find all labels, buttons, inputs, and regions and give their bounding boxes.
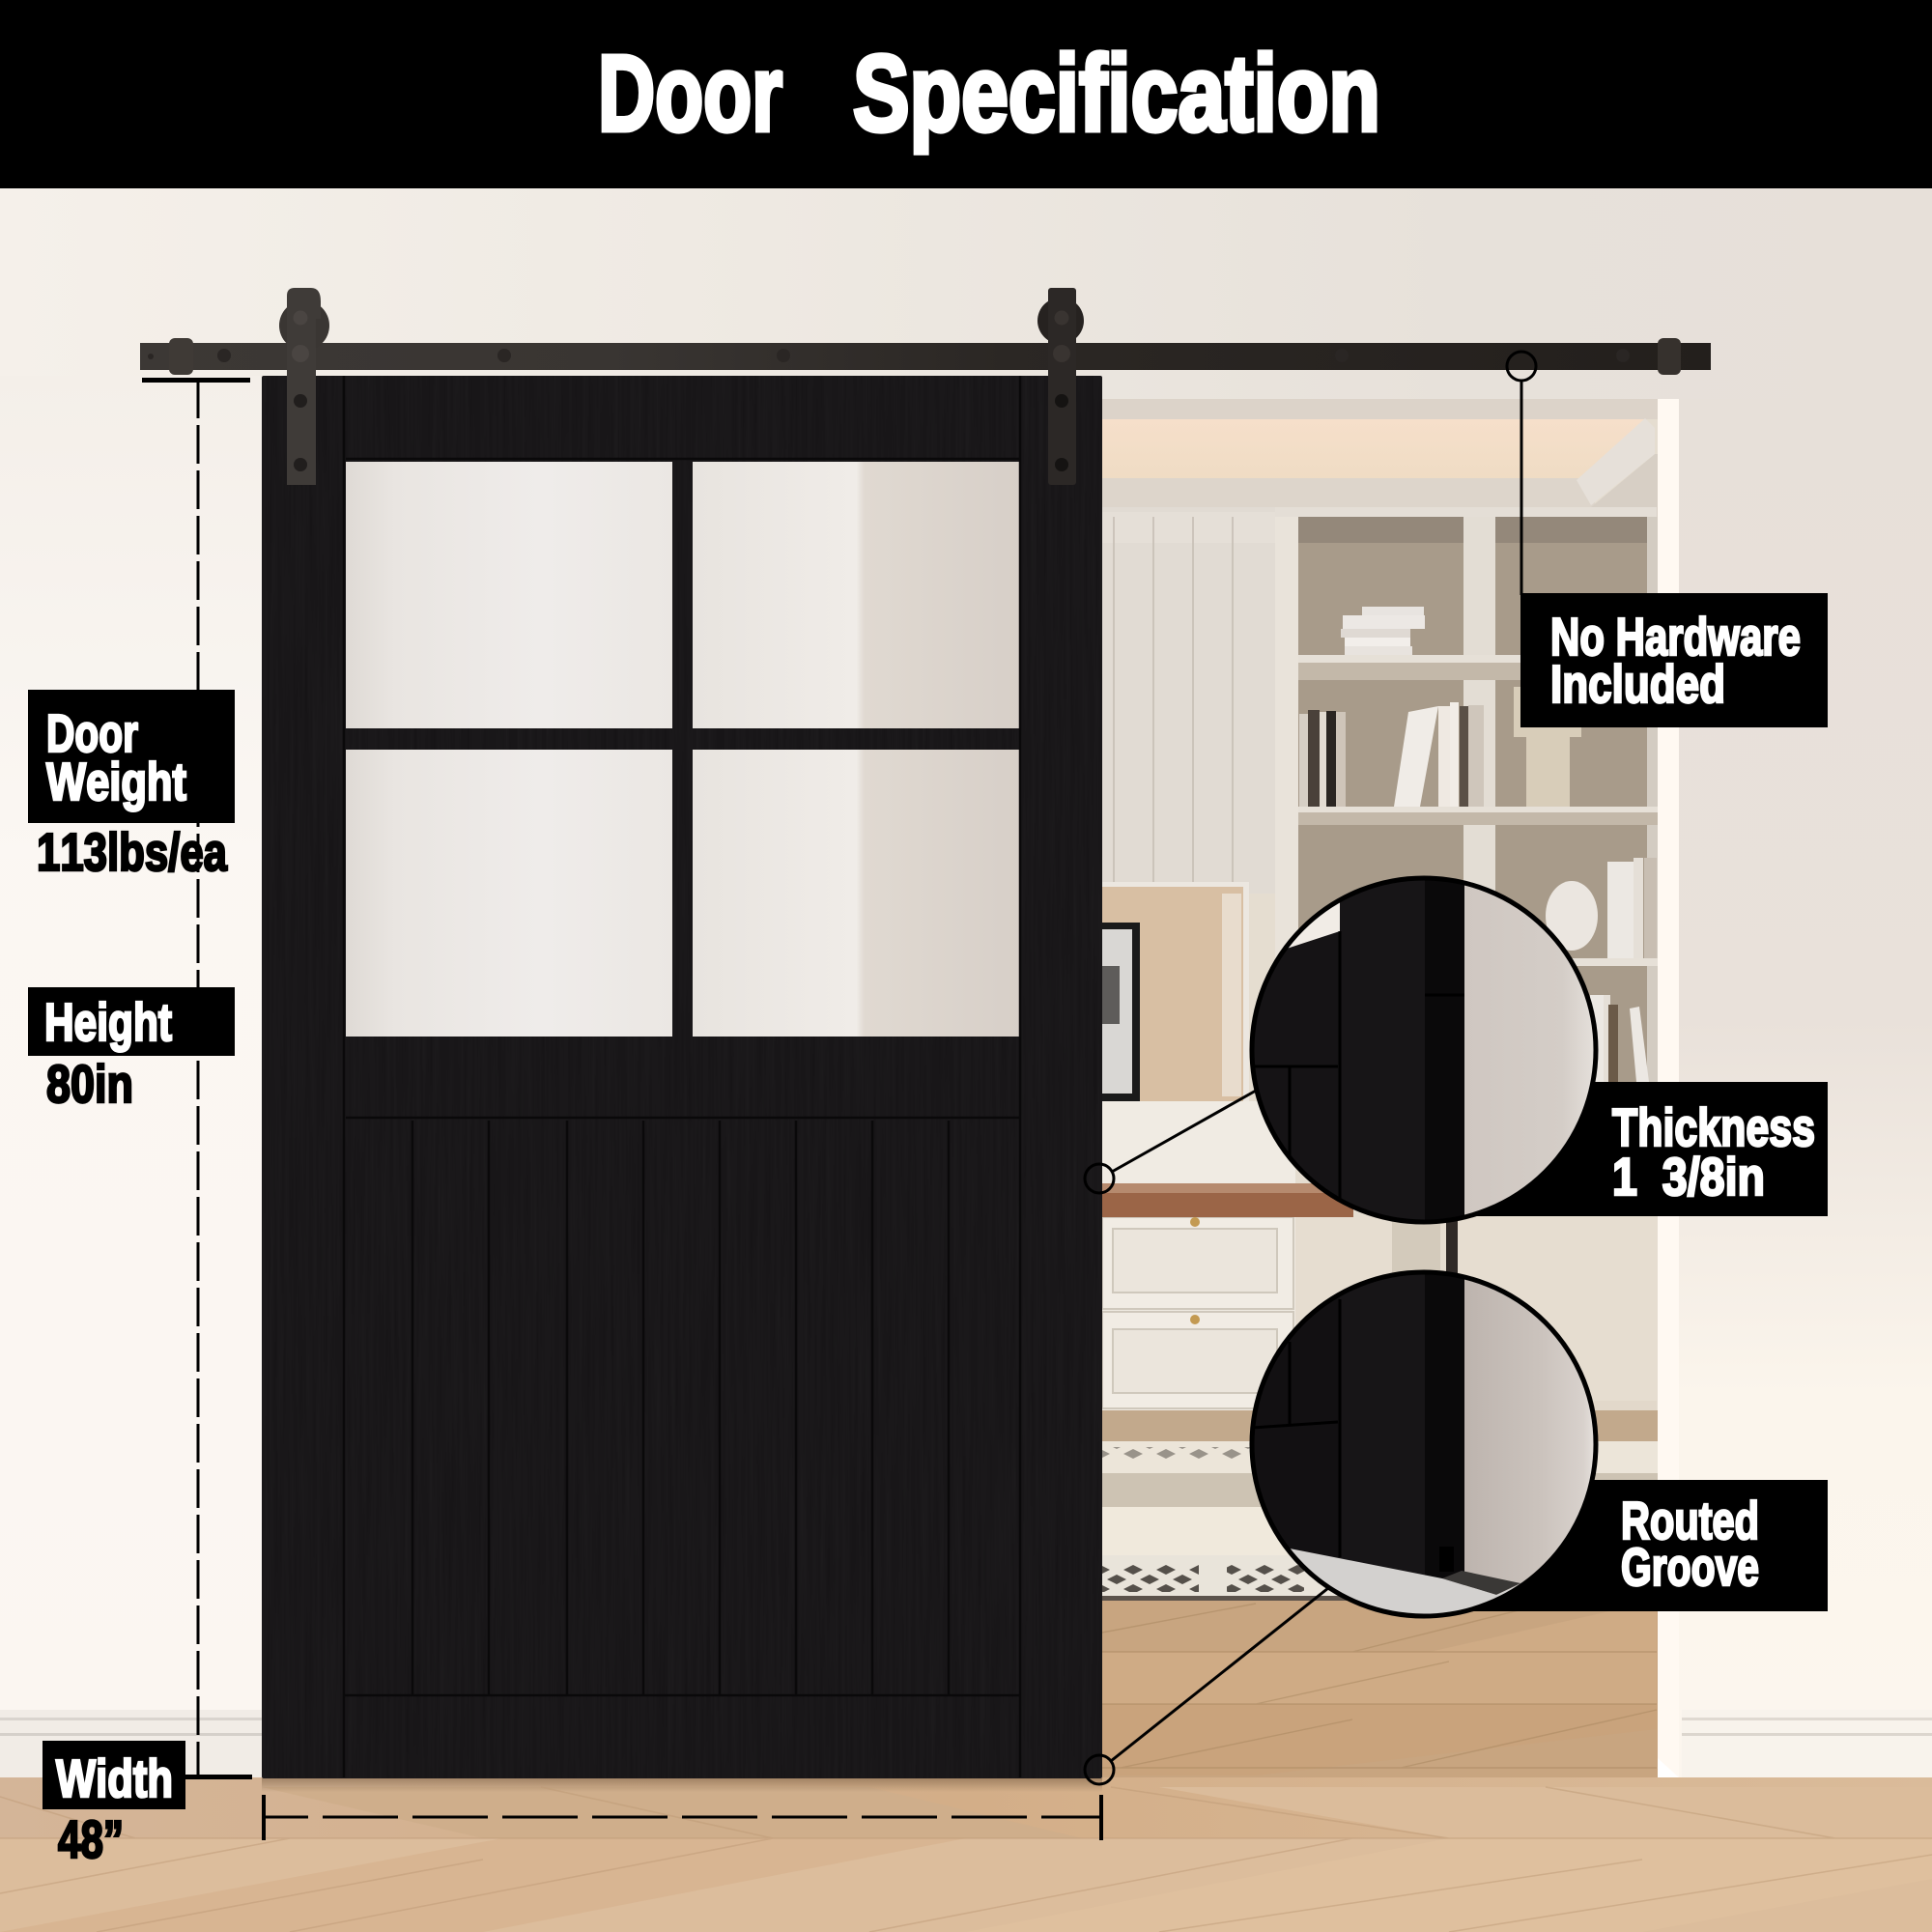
callout: no hardware included [1520,593,1828,727]
callout: door weight: Door [46,703,138,763]
sliding barn door [262,376,1102,1778]
callout: width: Width [56,1748,173,1808]
callout: thickness [1449,1082,1828,1216]
framed art [1102,882,1249,1104]
callout: height: Height [44,992,172,1052]
callout: width: 48” [58,1809,124,1869]
glass panes [346,462,1020,1037]
title [598,33,1380,154]
rail clips [169,338,193,375]
callout: routed groove: Routed [1621,1491,1759,1550]
door jamb [1658,399,1679,1777]
title: Door [598,33,782,154]
leader: routed groove marker [1085,1588,1328,1784]
callout: thickness: 1 3/8in [1612,1147,1765,1207]
books second shelf [1299,702,1484,807]
bookcase [1275,507,1658,1116]
callout: routed groove: Groove [1621,1537,1759,1597]
width dimension line [262,1795,1103,1840]
side crown moulding [1577,418,1655,505]
panelled wall [1102,507,1276,894]
ceiling glow [1102,419,1645,480]
ceiling soffit [1102,399,1658,419]
detail circle: door thickness [1246,874,1605,1227]
header band [0,0,1932,188]
books fourth shelf [1590,995,1649,1082]
crown moulding [1102,478,1595,507]
door frame [262,376,1102,1778]
callout: door weight: Weight [46,752,186,811]
callout: height [28,987,235,1114]
callout: no hardware included: Included [1550,654,1725,714]
height dimension line [142,378,252,1779]
callout: no hardware included: No Hardware [1550,607,1801,667]
back wall and floor of the room [1102,399,1658,1777]
books third shelf [1607,858,1657,958]
side corner wall [1591,454,1658,517]
plank grooves [344,376,1020,1777]
callout: thickness: Thickness [1612,1097,1815,1157]
callout: door weight [28,690,235,882]
callout: height: 80in [46,1054,133,1114]
rail bolts [148,349,1630,362]
leader: no hardware marker [1507,352,1536,595]
room opening [1102,399,1679,1777]
leader: thickness marker [1085,1091,1256,1193]
rail and hardware [140,288,1711,485]
vase [1546,881,1598,951]
callout: width [43,1741,185,1869]
callout: routed groove [1449,1480,1828,1611]
baseboards [0,1710,1932,1777]
sideboard drawers and counter [1102,1101,1657,1410]
wood floor [0,1777,1932,1932]
title: Specification [853,33,1380,154]
wood grain [262,376,1102,1778]
left hanger [279,288,329,485]
sculpture [1514,687,1581,807]
rail [140,343,1711,370]
callout: door weight: 113lbs/ea [37,822,227,882]
right hanger [1037,288,1084,485]
room floor and rug [1102,1410,1658,1777]
books top shelf [1341,607,1425,655]
detail circle: routed groove [1246,1267,1605,1633]
